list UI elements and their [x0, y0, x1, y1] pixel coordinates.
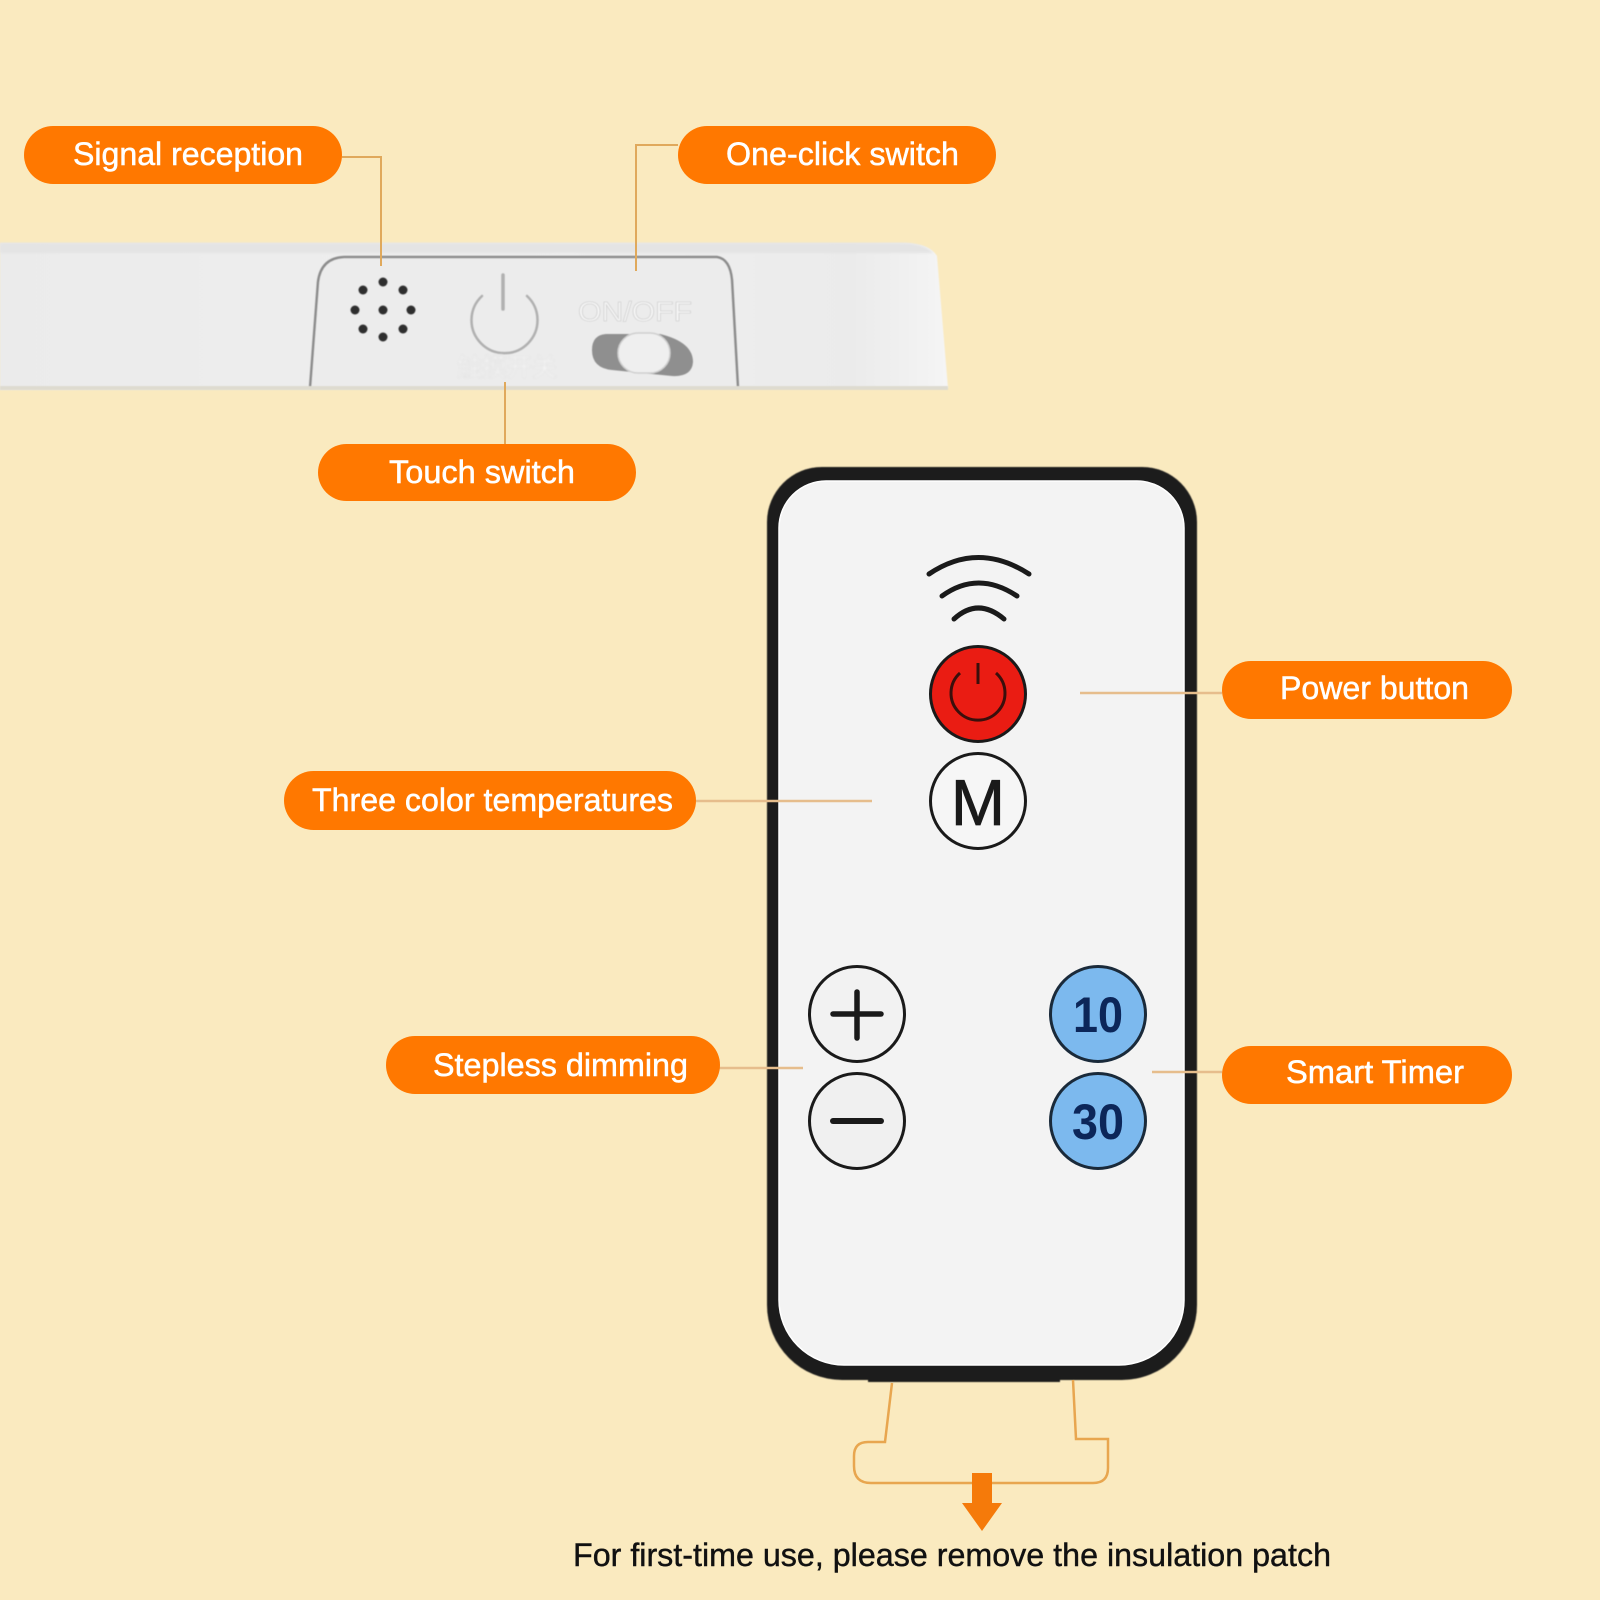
icon: touch power symbol — [472, 275, 538, 353]
timer 30 button: 30 — [1072, 1094, 1124, 1150]
remote face — [779, 481, 1184, 1365]
touch switch embossed label: 触摸开关 — [457, 354, 557, 382]
callout: smart timer — [1222, 1046, 1512, 1104]
callout: signal reception — [24, 126, 342, 184]
mode button — [930, 754, 1026, 848]
leader: one-click switch — [636, 145, 678, 271]
callout: three color temperatures: Three color temperatures — [312, 782, 673, 818]
on off embossed label: ON/OFF — [578, 296, 692, 327]
callout: stepless dimming: Stepless dimming — [433, 1047, 688, 1083]
callout: power button — [1222, 661, 1512, 719]
callout: smart timer: Smart Timer — [1286, 1054, 1464, 1090]
callout: one-click switch — [678, 126, 996, 184]
callout: touch switch — [318, 444, 636, 501]
device body — [0, 243, 948, 390]
arrow: down to note — [962, 1473, 1002, 1531]
leader: smart timer — [1152, 1071, 1222, 1073]
panel bottom edge — [0, 386, 948, 390]
callout: signal reception: Signal reception — [73, 136, 303, 172]
leader: touch switch — [504, 382, 506, 444]
callout: touch switch: Touch switch — [389, 454, 575, 490]
device top band — [0, 243, 933, 253]
power button — [930, 646, 1026, 742]
remote casing — [767, 467, 1197, 1382]
timer 10 button: 10 — [1073, 987, 1123, 1043]
callout: one-click switch: One-click switch — [726, 136, 959, 172]
leader: three color temperatures — [696, 800, 872, 802]
device edge with switch panel — [0, 243, 948, 390]
icon: signal reception holes — [350, 278, 416, 342]
leader: signal reception — [342, 157, 381, 266]
plus button — [810, 966, 904, 1062]
callout: power button: Power button — [1280, 670, 1469, 706]
callout: three color temperatures — [284, 771, 696, 830]
remote control — [767, 467, 1197, 1382]
leader: power button — [1080, 692, 1222, 694]
minus button — [810, 1074, 904, 1168]
callout: stepless dimming — [386, 1036, 720, 1094]
timer 10 button — [1050, 966, 1146, 1062]
mode button: M — [951, 766, 1005, 839]
leader: stepless dimming — [719, 1067, 803, 1069]
bracket from insulation patch — [854, 1380, 1108, 1483]
note: insulation patch: For first-time use, please remove the insulation patch — [573, 1537, 1331, 1573]
slide switch — [592, 333, 693, 376]
icon: signal waves — [929, 558, 1029, 619]
timer 30 button — [1050, 1074, 1146, 1168]
switch panel outline — [310, 257, 738, 388]
